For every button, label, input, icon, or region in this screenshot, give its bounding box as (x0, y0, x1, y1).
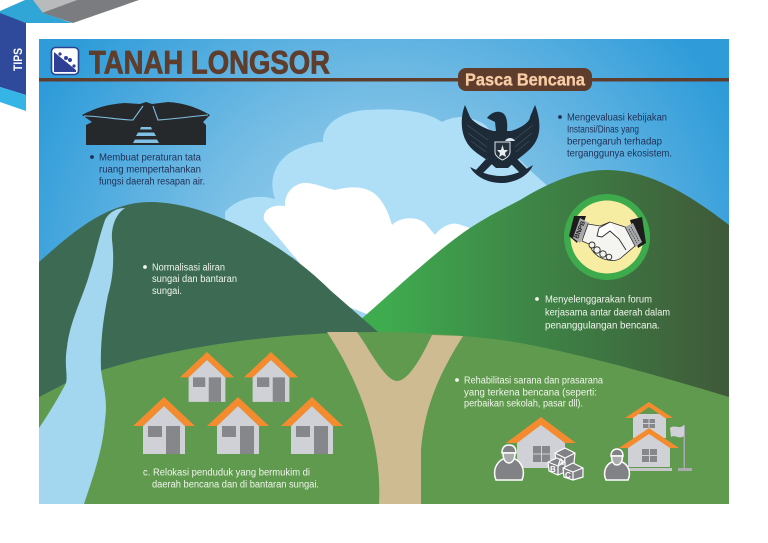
text: tata ruang: Membuat peraturan tata (99, 152, 201, 164)
icon: two-storey building with person and flag (605, 402, 692, 480)
text: evaluasi kebijakan: terganggunya ekosistem. (567, 148, 672, 160)
text: tata ruang (90, 152, 205, 188)
text: rehabilitasi: perbaikan sekolah, pasar dll). (464, 398, 583, 410)
icon: school house with person and blocks: C (565, 471, 571, 480)
text: normalisasi (143, 262, 237, 297)
text: tata ruang: ruang mempertahankan (99, 164, 201, 176)
icon: abc blocks (548, 448, 583, 480)
text: forum kerjasama (535, 294, 670, 332)
text: relokasi: daerah bencana dan di bantaran sungai. (152, 480, 319, 490)
text: normalisasi: sungai. (152, 286, 182, 297)
icon: house 5 (281, 397, 343, 454)
badge: pasca bencana: Pasca Bencana (465, 70, 585, 90)
text: evaluasi kebijakan (558, 112, 672, 160)
icon: school house with person and blocks (495, 417, 583, 480)
icon: house 3 (133, 397, 195, 454)
icon: school house with person and blocks: B (550, 465, 556, 474)
icon: landslide (52, 48, 78, 74)
text: forum kerjasama: Menyelenggarakan forum (545, 294, 652, 306)
icon: handshake: BNPB (573, 220, 587, 240)
road (327, 332, 463, 504)
ground (39, 332, 729, 504)
corner ribbon with TIPS tab: TIPS (11, 48, 25, 71)
icon: school house with person and blocks: A (558, 457, 564, 467)
text: forum kerjasama: penanggulangan bencana. (545, 320, 660, 332)
text: evaluasi kebijakan: berpengaruh terhadap (567, 136, 662, 148)
icon: person (605, 449, 629, 480)
icon: handshake (564, 194, 650, 280)
title: TANAH LONGSOR (89, 44, 330, 80)
sky background (39, 39, 729, 318)
text: rehabilitasi (455, 376, 603, 410)
text: forum kerjasama: kerjasama antar daerah dalam (545, 308, 670, 318)
icon: small house 1 (180, 352, 234, 402)
light blue cloud (225, 109, 552, 260)
icon: small house 2 (244, 352, 298, 402)
text: relokasi: c. Relokasi penduduk yang bermukim di (143, 468, 310, 478)
text: rehabilitasi: Rehabilitasi sarana dan prasarana (464, 376, 603, 386)
header rule (39, 78, 729, 82)
text: tata ruang: fungsi daerah resapan air. (99, 176, 205, 188)
icon: stadium building (82, 102, 210, 145)
text: relokasi (143, 468, 319, 490)
text: normalisasi: Normalisasi aliran (152, 262, 225, 274)
icon: house 4 (207, 397, 269, 454)
icon: garuda emblem (462, 105, 539, 183)
river (39, 208, 125, 504)
icon: flag (670, 425, 692, 471)
houses: relocation group (133, 352, 343, 454)
corner ribbon with TIPS tab (0, 0, 139, 111)
panel: landscape scene (39, 39, 729, 504)
icon: person (495, 445, 523, 480)
text: rehabilitasi: yang terkena bencana (seperti: (464, 388, 597, 398)
right hill (360, 170, 729, 400)
text: normalisasi: sungai dan bantaran (152, 274, 237, 285)
left hill (39, 202, 378, 400)
white cloud (264, 183, 470, 314)
text: evaluasi kebijakan: Instansi/Dinas yang (567, 124, 639, 136)
text: evaluasi kebijakan: Mengevaluasi kebijakan (567, 112, 667, 124)
